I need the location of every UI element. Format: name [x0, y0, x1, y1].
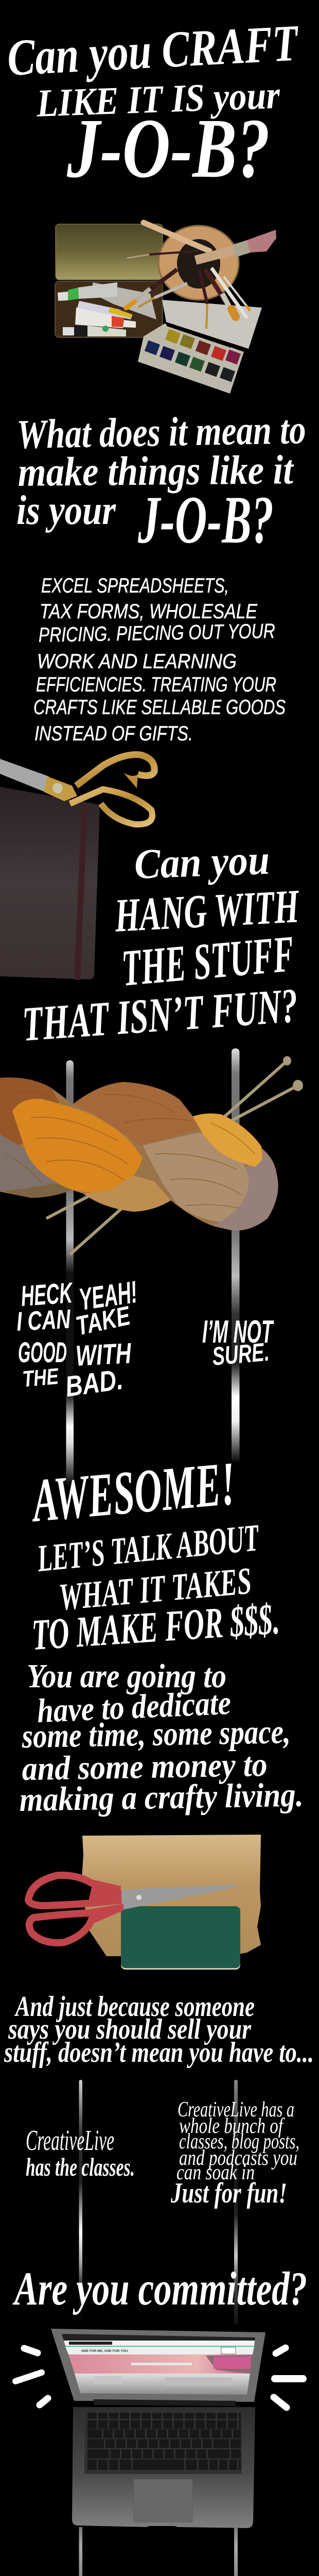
- gold handles: [44, 755, 154, 824]
- notebook elastic band: [74, 804, 87, 980]
- laptop hinge: [94, 2399, 236, 2406]
- scissors handles: [28, 1875, 123, 1943]
- text block: just because someone says: says you should sell your: [8, 2013, 252, 2045]
- option: just for fun: whole bunch of: [179, 2114, 285, 2138]
- text block: just because someone says: [4, 1991, 314, 2069]
- option: heck yeah: BAD.: [63, 1363, 125, 1403]
- heading: let's talk about: [30, 1517, 281, 1659]
- text block: dedicate time: [19, 1657, 304, 1819]
- option: heck yeah: YEAH!: [77, 1275, 139, 1317]
- keyboard: [84, 2410, 242, 2474]
- connector: right path: [232, 1048, 240, 1463]
- option: heck yeah: THE: [22, 1364, 60, 1392]
- option: not sure: [202, 1314, 274, 1371]
- text block: dedicate time: You are going to: [27, 1657, 226, 1695]
- option: just for fun: can soak in: [176, 2161, 255, 2184]
- text block: job description: WORK AND LEARNING: [37, 650, 237, 673]
- connector: left path: [66, 1060, 74, 1486]
- needle one: [70, 1056, 291, 1255]
- laptop lid: [51, 2329, 265, 2402]
- trackpad: [134, 2479, 192, 2522]
- connector: classes path: [79, 2080, 82, 2325]
- connector: fun path: [234, 2080, 238, 2325]
- watercolour palette tray: [138, 324, 244, 394]
- option: heck yeah: WITH: [75, 1336, 133, 1372]
- palette gap: [166, 322, 232, 348]
- option: heck yeah: I CAN: [16, 1304, 72, 1337]
- large flat brush: [196, 230, 276, 260]
- paint tube: grey: [93, 282, 156, 319]
- heading: can you hang with the stuff: [21, 836, 301, 1052]
- connector: totally path: [79, 2527, 82, 2576]
- option: just for fun: Just for fun!: [170, 2177, 287, 2209]
- text block: dedicate time: have to dedicate: [36, 1684, 232, 1730]
- connector: maybe path: [234, 2527, 238, 2576]
- pencil: [144, 223, 209, 251]
- laptop screen: [62, 2334, 255, 2395]
- option: heck yeah: [16, 1275, 139, 1403]
- brushes in jar: [126, 268, 250, 329]
- option: heck yeah: HECK: [20, 1276, 75, 1312]
- needle two: [46, 1080, 303, 1218]
- paint tube: red label: [75, 308, 136, 328]
- burst rays: laptop: [15, 2348, 303, 2408]
- wood slice: [158, 226, 239, 300]
- notebook: [0, 787, 100, 979]
- illustration: paint tin, brushes and watercolour palette: [55, 223, 276, 394]
- yarn skein: [0, 1077, 278, 1231]
- text block: job description: INSTEAD OF GIFTS.: [34, 722, 193, 745]
- illustration: yarn and knitting needles: [0, 1056, 303, 1255]
- fine brush: [127, 251, 199, 258]
- text block: dedicate time: and some money to: [22, 1746, 268, 1788]
- watercolour palette lid: [162, 300, 262, 349]
- text block: job description: [33, 574, 286, 745]
- title: J-O-B?: [66, 101, 270, 195]
- paint tube: green label: [58, 282, 117, 301]
- laptop base: [72, 2407, 255, 2528]
- illustration: red scissors, paper and green tin: [28, 1835, 261, 1970]
- scissors blade: [119, 1885, 237, 1910]
- option: just for fun: [170, 2098, 299, 2209]
- text block: job description: EXCEL SPREADSHEETS,: [41, 574, 229, 597]
- scissor blades: [0, 759, 49, 792]
- option: creativelive has the classes: [26, 2125, 135, 2181]
- illustration: gold scissors and notebook: [0, 755, 154, 980]
- option: not sure: SURE.: [211, 1337, 271, 1371]
- title: [6, 14, 301, 195]
- option: creativelive has the classes: CreativeLive: [26, 2125, 114, 2157]
- title: LIKE IT IS your: [36, 73, 281, 125]
- paint tube: purple label: [77, 301, 132, 319]
- green tin: [121, 1906, 240, 1970]
- tin base: [55, 281, 163, 337]
- option: heck yeah: GOOD: [18, 1336, 67, 1368]
- laptop screen: ONE FOR ME, ONE FOR YOU.: [81, 2349, 129, 2353]
- heading: what does it mean: [16, 407, 306, 557]
- text block: job description: TAX FORMS, WHOLESALE: [40, 600, 258, 623]
- paint tube: black label: [63, 326, 126, 336]
- illustration: laptop: [51, 2329, 265, 2528]
- heading: what does it mean: is your: [16, 488, 116, 533]
- torn paper: [81, 1835, 261, 1956]
- heading: can you hang with the stuff: Can you: [133, 836, 270, 888]
- tin lid: [56, 224, 163, 280]
- paint pans: [145, 329, 241, 382]
- option: heck yeah: TAKE: [73, 1301, 133, 1342]
- option: creativelive has the classes: has the classes.: [26, 2153, 135, 2181]
